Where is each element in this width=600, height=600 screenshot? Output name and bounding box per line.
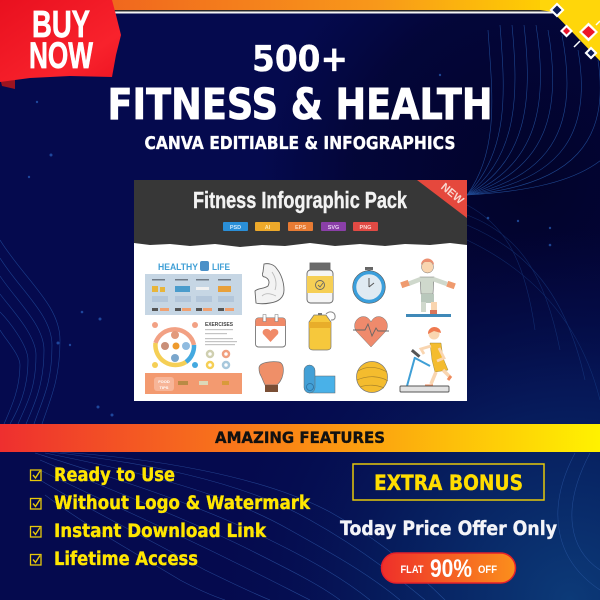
icon: person with dumbbells	[400, 259, 456, 317]
mini ring chart	[155, 329, 194, 365]
title	[108, 39, 492, 154]
preview header: NEW	[438, 181, 466, 207]
icon: exercise ball	[356, 362, 388, 392]
title: CANVA EDITIABLE & INFOGRAPHICS	[144, 133, 456, 154]
discount pill	[382, 553, 516, 583]
preview header: EPS	[295, 225, 306, 231]
discount pill: FLAT	[400, 564, 424, 576]
mini infographic: HEALTHY	[158, 262, 199, 273]
mini infographic: TIPS	[160, 385, 169, 390]
feature list	[30, 465, 311, 570]
wave lines: lower right	[467, 205, 600, 400]
preview panel	[0, 180, 600, 583]
icon: stopwatch	[353, 267, 385, 303]
extra bonus box: EXTRA BONUS	[374, 471, 523, 496]
feature: without logo: Without Logo & Watermark	[54, 493, 311, 514]
mini infographic: FOOD	[158, 379, 170, 384]
title: FITNESS & HEALTH	[108, 80, 492, 130]
icon: heart with pulse	[353, 317, 389, 347]
icon: treadmill runner	[400, 327, 451, 392]
icon: calendar with heart	[256, 314, 286, 347]
feature: instant download: Instant Download Link	[54, 521, 267, 542]
star specks	[28, 74, 551, 417]
preview header: AI	[265, 225, 271, 231]
features bar	[0, 424, 600, 452]
wave lines: top right	[467, 25, 600, 195]
mini infographic: EXERCISES	[205, 322, 234, 328]
preview header: PNG	[360, 225, 371, 231]
top bar	[100, 0, 560, 14]
discount pill: 90%	[430, 555, 472, 583]
buy now ribbon: NOW	[29, 35, 93, 76]
feature: lifetime access: Lifetime Access	[54, 549, 198, 570]
preview header: SVG	[328, 225, 339, 231]
icon: flexed arm	[255, 264, 284, 304]
corner ornament	[540, 0, 600, 61]
discount pill: OFF	[478, 564, 497, 576]
icon: yoga mat	[304, 365, 335, 393]
features bar: AMAZING FEATURES	[215, 428, 385, 447]
preview header	[134, 180, 467, 247]
mini infographic	[145, 261, 242, 394]
wave lines: bottom	[35, 452, 445, 600]
icon: supplement jar	[307, 263, 333, 303]
wave lines: left	[0, 240, 60, 424]
offer line: Today Price Offer Only	[340, 517, 557, 540]
wave lines: far right bottom	[558, 453, 600, 590]
icon: sports bottle	[309, 312, 335, 350]
mini infographic: LIFE	[212, 262, 230, 273]
title: 500+	[252, 39, 348, 80]
buy now ribbon	[0, 0, 121, 89]
preview header: PSD	[230, 225, 241, 231]
feature: ready to use: Ready to Use	[54, 465, 175, 486]
buy now ribbon: BUY	[32, 4, 90, 46]
extra bonus box	[353, 464, 544, 500]
preview header: Fitness Infographic Pack	[193, 187, 407, 213]
icon: boxing glove	[259, 362, 283, 392]
